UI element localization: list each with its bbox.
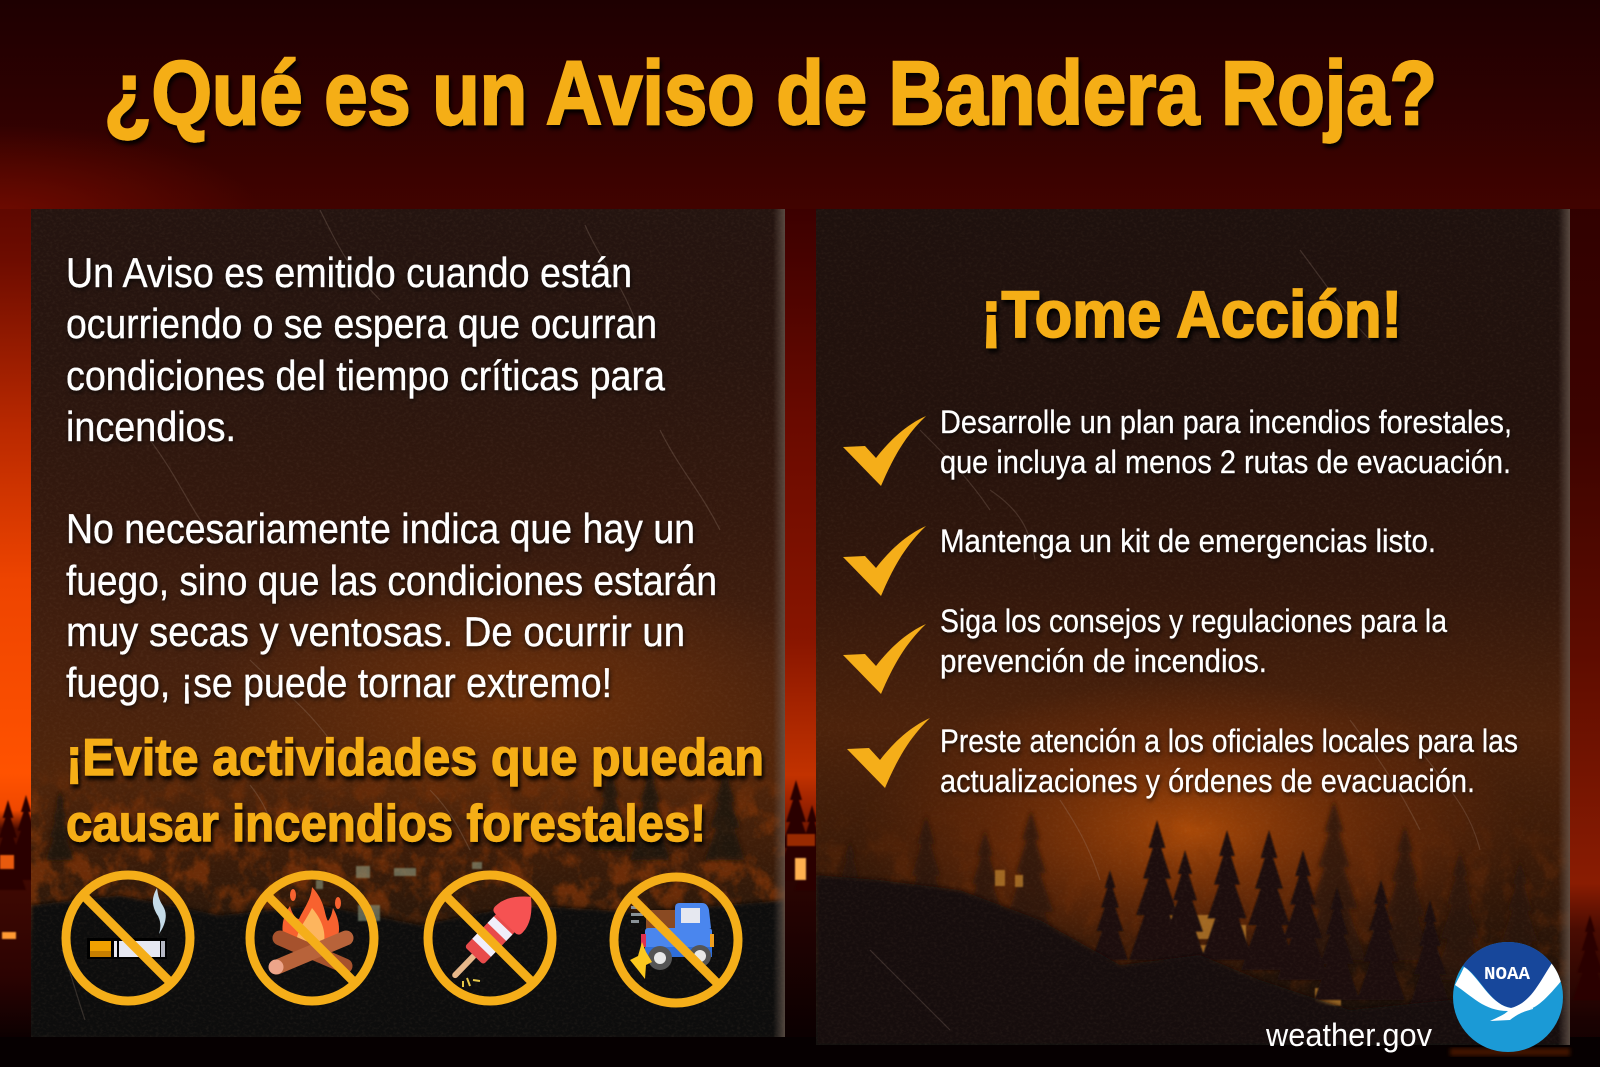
text block: explanation xyxy=(66,505,717,706)
heading: take action: ¡Tome Acción! xyxy=(981,277,1402,351)
icon: no fireworks xyxy=(428,875,552,1001)
text block: definition xyxy=(66,249,666,450)
text block: explanation: fuego, sino que las condiciones estarán xyxy=(66,557,717,604)
text block: explanation: muy secas y ventosas. De ocurrir un xyxy=(66,608,685,655)
text block: definition: Un Aviso es emitido cuando están xyxy=(66,249,632,296)
checklist item 4 xyxy=(847,718,1518,799)
icon: no smoking xyxy=(66,875,190,1001)
icon: no campfire xyxy=(250,875,374,1001)
checklist item 4: actualizaciones y órdenes de evacuación. xyxy=(940,763,1475,799)
panel: take action xyxy=(816,209,1570,1045)
text block: definition: ocurriendo o se espera que ocurran xyxy=(66,300,657,347)
checklist item 3: Siga los consejos y regulaciones para la xyxy=(940,603,1448,639)
text block: definition: incendios. xyxy=(66,403,236,450)
checklist item 2: Mantenga un kit de emergencias listo. xyxy=(940,523,1436,559)
logo: NOAA: NOAA xyxy=(1484,965,1530,985)
website label: weather.gov xyxy=(1265,1017,1432,1053)
checklist item 3 xyxy=(843,603,1448,694)
checklist item 1: que incluya al menos 2 rutas de evacuación. xyxy=(940,444,1511,480)
checklist item 1: Desarrolle un plan para incendios forestales, xyxy=(940,404,1512,440)
heading: avoid activities: causar incendios forestales! xyxy=(66,795,706,853)
checklist item 3: prevención de incendios. xyxy=(940,643,1267,679)
panel background: right xyxy=(816,209,1570,1045)
text block: explanation: No necesariamente indica que hay un xyxy=(66,505,695,552)
panel background: left xyxy=(31,209,840,1037)
heading: avoid activities: ¡Evite actividades que puedan xyxy=(66,729,764,787)
icon: no dragging vehicle xyxy=(614,877,738,1003)
text block: explanation: fuego, ¡se puede tornar extremo! xyxy=(66,659,612,706)
text block: definition: condiciones del tiempo críticas para xyxy=(66,352,666,399)
logo: NOAA xyxy=(1450,942,1566,1052)
checklist item 2 xyxy=(843,523,1436,596)
panel: what is a warning xyxy=(31,209,840,1037)
checklist item 4: Preste atención a los oficiales locales para las xyxy=(940,723,1518,759)
heading: avoid activities xyxy=(66,729,764,853)
checklist item 1 xyxy=(843,404,1512,486)
